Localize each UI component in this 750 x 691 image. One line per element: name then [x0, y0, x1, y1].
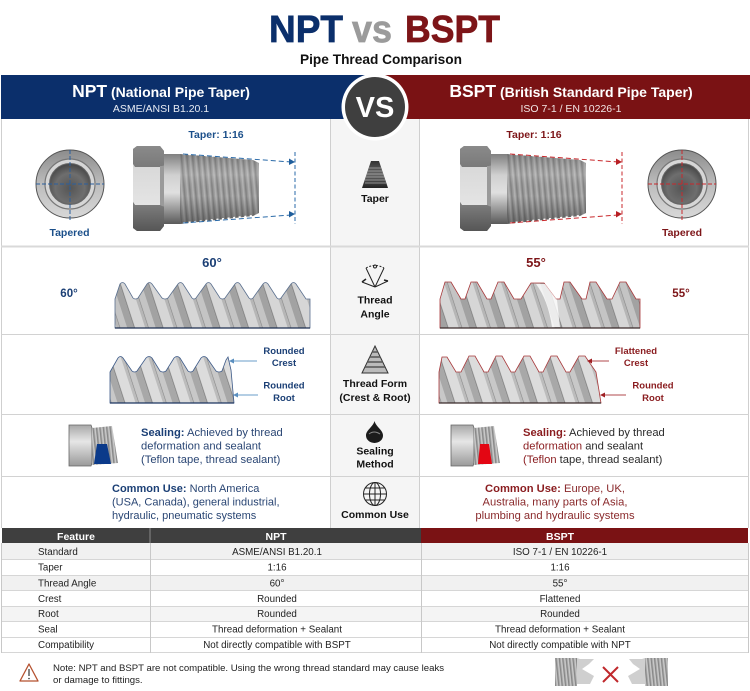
- table rows: Root: [38, 609, 59, 620]
- BSPT thread angle profile: [440, 255, 690, 328]
- table header: NPT: [266, 531, 287, 543]
- table rows: Thread deformation + Sealant: [212, 624, 342, 636]
- header: BSPT: [375, 75, 750, 119]
- NPT taper diagram: [133, 129, 295, 231]
- table rows: Thread Angle: [38, 578, 97, 590]
- table rows: ASME/ANSI B1.20.1: [232, 547, 322, 558]
- BSPT thread form profile: Root: [642, 393, 665, 404]
- NPT thread angle profile: [60, 255, 310, 328]
- NPT thread form profile: Root: [273, 393, 296, 404]
- header: BSPT: BSPT (British Standard Pipe Taper): [449, 81, 693, 101]
- icon: thread form: [339, 346, 411, 404]
- note: [53, 663, 444, 686]
- table rows: ISO 7-1 / EN 10226-1: [513, 547, 607, 558]
- BSPT sealing: (Teflon tape, thread sealant): [523, 454, 663, 466]
- note: Note: NPT and BSPT are not compatible. Using the wrong thread standard may cause leaks: [53, 663, 444, 674]
- icon: incompatible threads: [555, 658, 668, 686]
- BSPT common use: Australia, many parts of Asia,: [483, 496, 627, 508]
- NPT sealing: [69, 425, 283, 466]
- table rows: Rounded: [540, 609, 580, 620]
- BSPT end view: Tapered: [662, 227, 702, 239]
- icon: sealing method: Method: [356, 458, 394, 470]
- table rows: Thread deformation + Sealant: [495, 624, 625, 636]
- NPT end view: Tapered: [49, 227, 90, 239]
- BSPT thread angle profile: 55°: [526, 255, 546, 270]
- BSPT sealing: [451, 425, 665, 466]
- BSPT common use: Common Use: Europe, UK,: [485, 483, 625, 495]
- icon: thread angle: Angle: [360, 308, 390, 320]
- NPT common use: hydraulic, pneumatic systems: [112, 510, 257, 522]
- title: BSPT: [405, 9, 500, 51]
- title: vs: [352, 9, 392, 51]
- NPT common use: (USA, Canada), general industrial,: [112, 496, 280, 508]
- BSPT thread form profile: Flattened: [615, 346, 657, 357]
- table header: BSPT: [546, 531, 575, 543]
- table rows: 1:16: [267, 562, 287, 574]
- icon: thread form: (Crest & Root): [339, 392, 411, 404]
- BSPT sealing: deformation and sealant: [523, 440, 644, 452]
- header: BSPT: ISO 7-1 / EN 10226-1: [521, 103, 622, 115]
- NPT thread angle profile: 60°: [60, 288, 78, 300]
- NPT sealing: deformation and sealant: [141, 440, 262, 452]
- title: [269, 9, 500, 51]
- table header: Feature: [57, 531, 95, 543]
- VS badge: [342, 74, 408, 140]
- note: or damage to fittings.: [53, 675, 143, 686]
- BSPT common use: [475, 483, 635, 522]
- icon: common use globe: Common Use: [341, 509, 409, 521]
- table rows: Seal: [38, 624, 58, 636]
- BSPT sealing: Sealing: Achieved by thread: [523, 427, 665, 439]
- icon: sealing method: [356, 421, 394, 470]
- NPT thread angle profile: 60°: [202, 255, 222, 270]
- NPT taper diagram: Taper: 1:16: [188, 129, 244, 141]
- BSPT taper diagram: Taper: 1:16: [506, 129, 562, 141]
- NPT sealing: (Teflon tape, thread sealant): [141, 454, 281, 466]
- table rows: Standard: [38, 547, 78, 558]
- table rows: Compatibility: [38, 640, 94, 651]
- BSPT common use: plumbing and hydraulic systems: [475, 510, 635, 522]
- table rows: 55°: [553, 578, 567, 590]
- BSPT taper diagram: [460, 129, 622, 231]
- BSPT thread form profile: Rounded: [632, 380, 674, 392]
- table header: [2, 528, 748, 543]
- icon: common use globe: [341, 482, 409, 521]
- NPT thread form profile: Rounded: [263, 380, 305, 392]
- NPT thread form profile: Crest: [272, 358, 297, 369]
- NPT common use: [112, 483, 280, 522]
- NPT thread form profile: Rounded: [263, 346, 305, 357]
- icon: taper: [361, 161, 389, 205]
- NPT end view: [36, 150, 104, 239]
- header: NPT: NPT (National Pipe Taper): [72, 81, 250, 101]
- BSPT thread angle profile: 55°: [672, 288, 690, 300]
- header: NPT: [1, 75, 375, 119]
- table rows: 60°: [270, 578, 284, 590]
- comparison table: [2, 528, 748, 653]
- table rows: Not directly compatible with NPT: [489, 640, 631, 651]
- subtitle: Pipe Thread Comparison: [300, 51, 462, 67]
- comparison grid frame: [1, 119, 749, 528]
- icon: taper: Taper: [361, 193, 389, 205]
- table rows: Not directly compatible with BSPT: [203, 640, 351, 651]
- NPT thread form profile: [110, 346, 305, 404]
- table rows: Taper: [38, 562, 63, 574]
- table rows: Rounded: [257, 609, 297, 620]
- header: NPT: ASME/ANSI B1.20.1: [113, 103, 209, 115]
- table rows: [2, 543, 748, 653]
- VS badge: VS: [356, 92, 394, 124]
- table rows: Crest: [38, 594, 62, 605]
- table rows: Flattened: [540, 594, 580, 605]
- BSPT thread form profile: [439, 346, 674, 404]
- icon: thread angle: [357, 265, 393, 320]
- BSPT thread form profile: Crest: [624, 358, 649, 369]
- icon: sealing method: Sealing: [356, 446, 394, 458]
- BSPT end view: [648, 150, 716, 239]
- NPT common use: Common Use: North America: [112, 483, 260, 495]
- icon: thread angle: Thread: [357, 294, 393, 306]
- icon: thread form: Thread Form: [343, 378, 407, 390]
- title: NPT: [269, 9, 343, 51]
- NPT sealing: Sealing: Achieved by thread: [141, 427, 283, 439]
- table rows: 1:16: [550, 562, 570, 574]
- icon: warning: [20, 664, 38, 681]
- table rows: Rounded: [257, 594, 297, 605]
